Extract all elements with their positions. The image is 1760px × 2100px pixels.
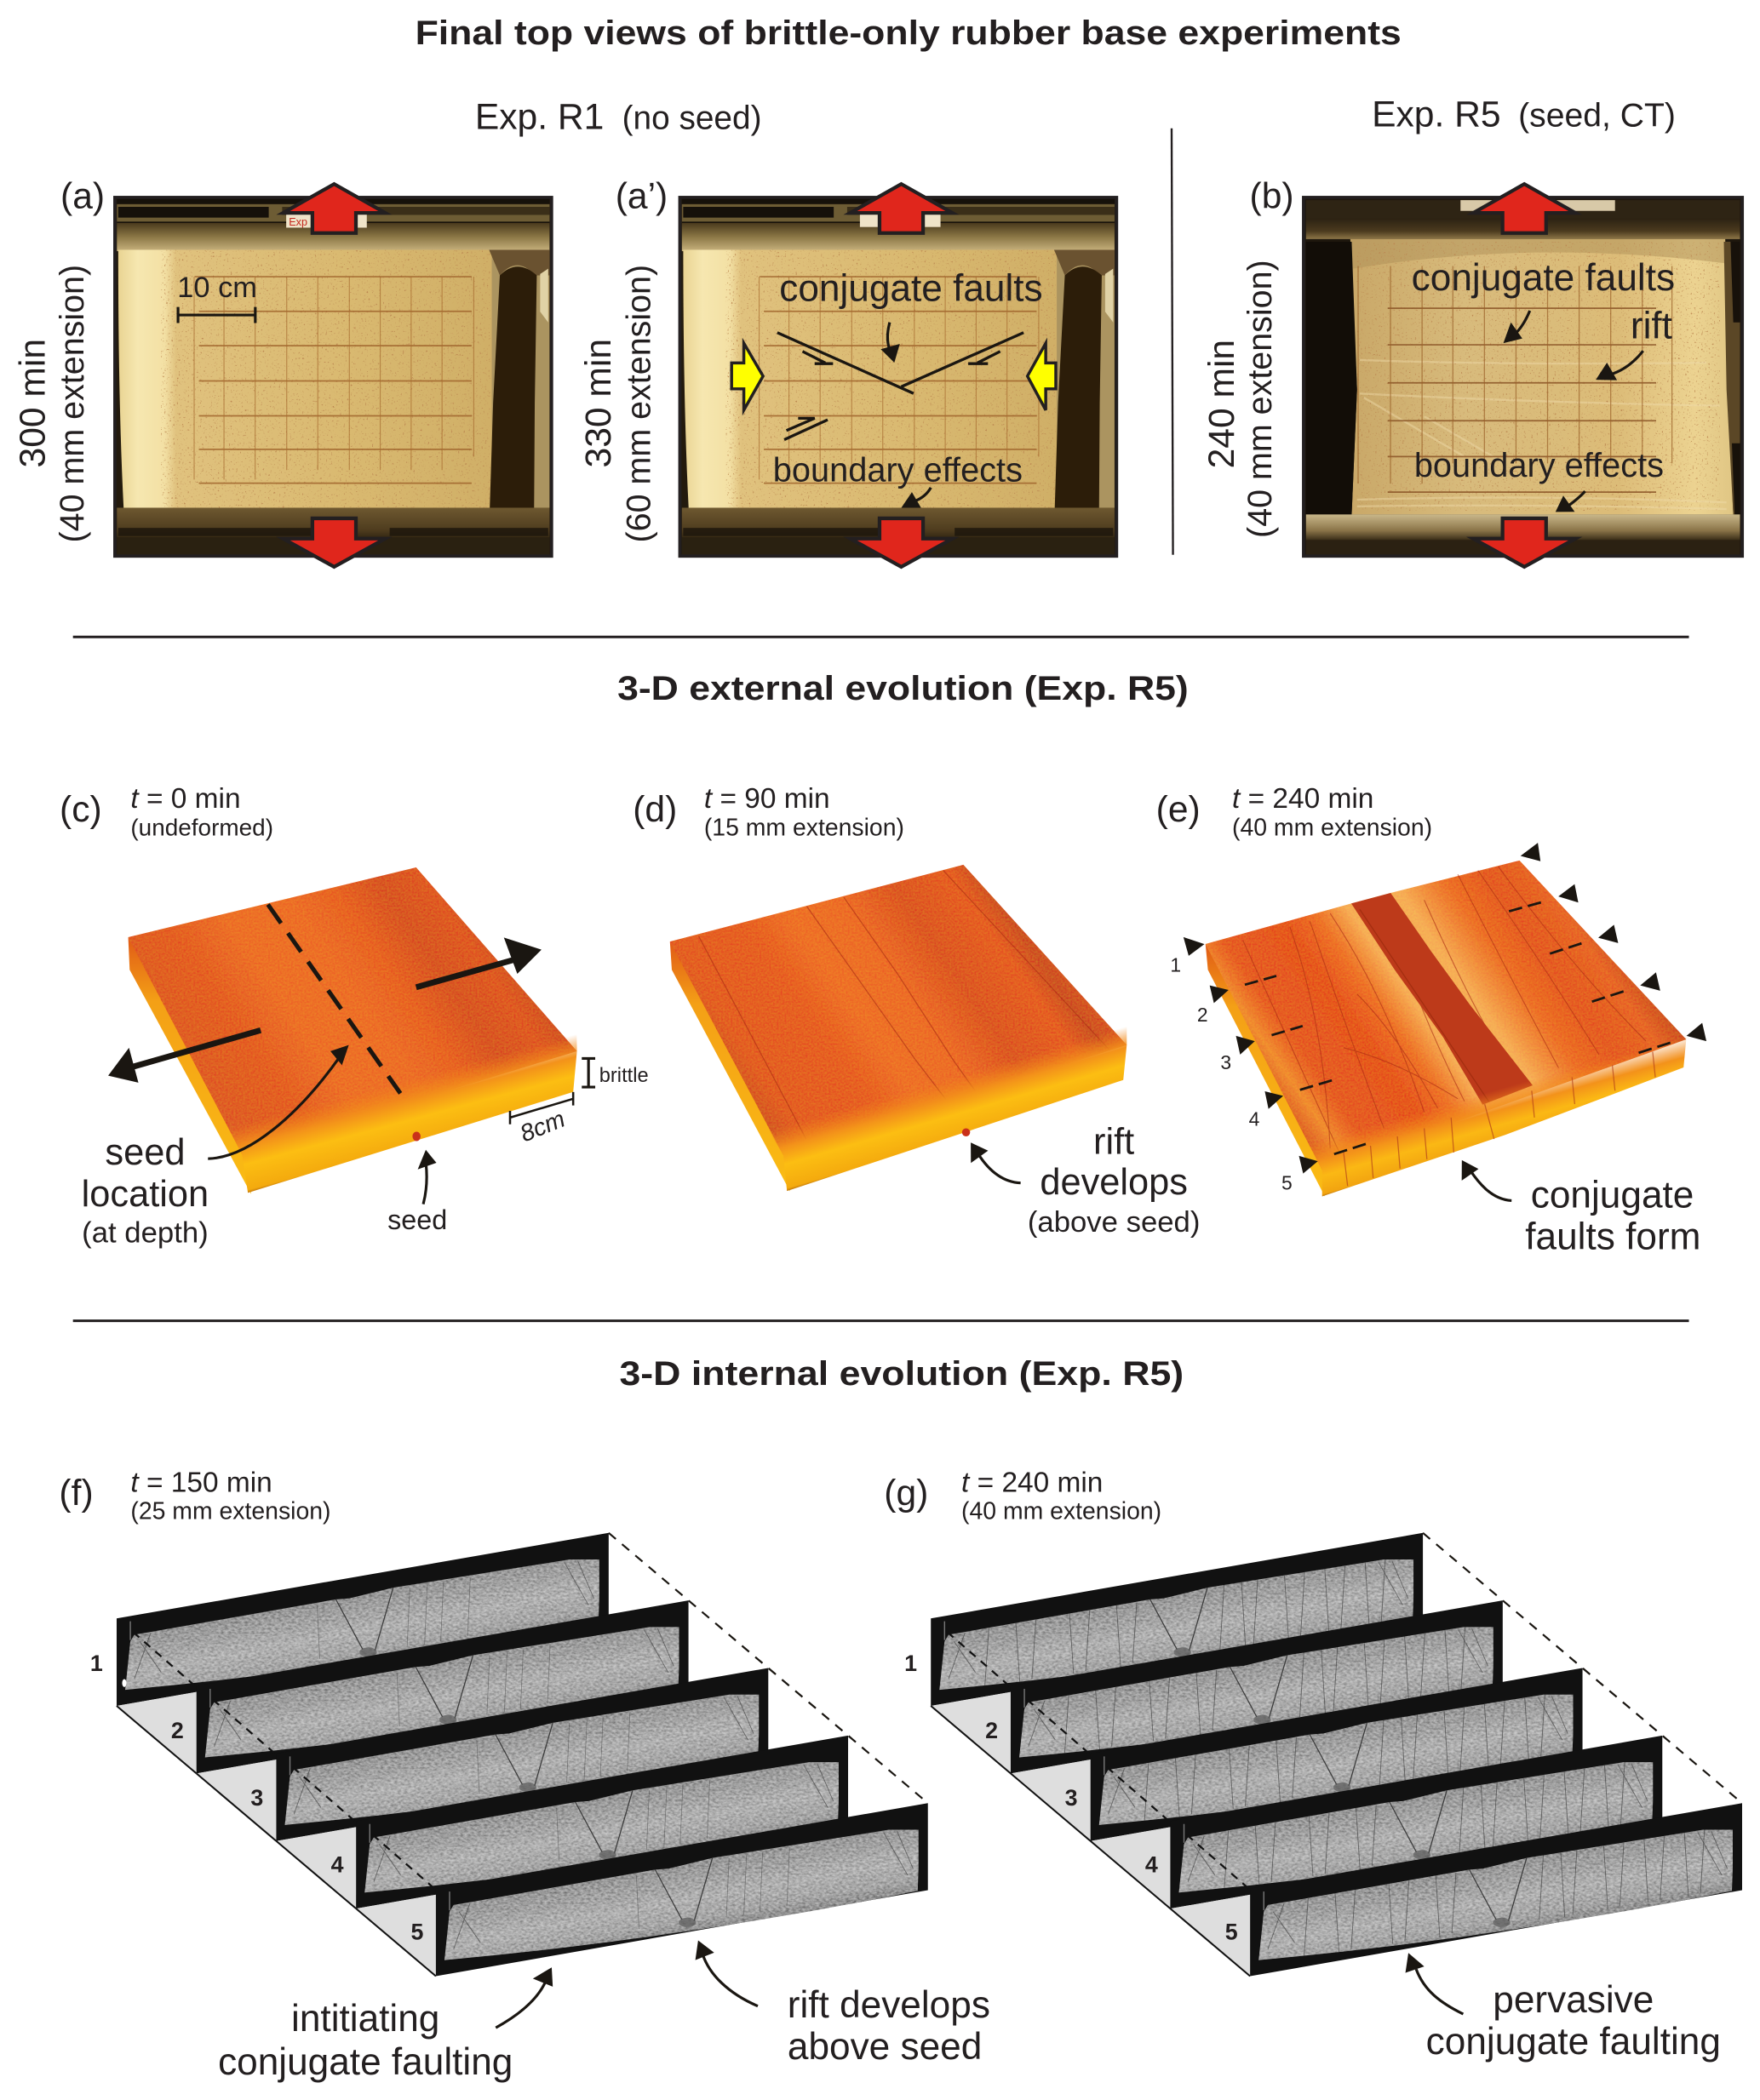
extension arrow right (416, 937, 542, 987)
section 4 g (1170, 1736, 1662, 1977)
duration label a (13, 265, 91, 542)
panel: (b) top view Exp. R5 (1201, 176, 1742, 567)
dashed seed trace (268, 905, 400, 1093)
heading: Exp. R1: (no seed) (622, 100, 762, 136)
boundary effects label and arrow (773, 452, 1023, 507)
yellow compression arrow left (731, 343, 763, 410)
3-D block d (670, 865, 1127, 1192)
section numbers: 4 (1249, 1107, 1260, 1130)
section 1 g (904, 1533, 1423, 1773)
section 2 (197, 1600, 689, 1841)
time label c: (undeformed) (130, 814, 273, 840)
CT sections g (904, 1533, 1742, 1977)
rift label and arrow b: rift (1631, 306, 1672, 347)
fault traces (777, 333, 1023, 439)
time label g (961, 1467, 1161, 1525)
panel: (a') top view with annotations (578, 176, 1116, 567)
section 2 g (1011, 1600, 1503, 1841)
panel letter c: (c) (60, 789, 102, 830)
3-D block c (129, 867, 577, 1194)
conjugate faults form label and arrow (1462, 1160, 1700, 1258)
section numbers (1170, 954, 1293, 1193)
section 1: 2 (171, 1718, 184, 1743)
pervasive conjugate faulting label and arrow (1406, 1953, 1721, 2063)
pervasive conjugate faulting label and arrow: conjugate faulting (1426, 2021, 1721, 2063)
red extension arrow up a' (851, 184, 952, 233)
panel: (e) conjugate faults block (1156, 783, 1706, 1258)
red extension arrow down a' (851, 518, 952, 567)
section 1 g: 1 (904, 1651, 917, 1676)
section 4 g: 5 (1225, 1920, 1238, 1945)
time label d (704, 783, 904, 841)
time label g: t = 240 min (961, 1467, 1103, 1498)
time label f: t = 150 min (130, 1467, 272, 1498)
duration label b: (40 mm extension) (1241, 260, 1279, 538)
boundary effects label and arrow b (1414, 447, 1664, 512)
time label g: (40 mm extension) (961, 1498, 1161, 1525)
3-D block e (1206, 861, 1686, 1196)
title: Final top views of brittle-only rubber base experiments (416, 14, 1402, 52)
duration label b: 240 min (1201, 340, 1242, 468)
section numbers: 5 (1281, 1171, 1293, 1193)
pervasive conjugate faulting label and arrow: pervasive (1493, 1979, 1654, 2021)
panel letter d: (d) (633, 789, 677, 830)
8 cm scale (510, 1092, 573, 1147)
time label d: (15 mm extension) (704, 814, 904, 841)
panel letter b: (b) (1250, 176, 1294, 217)
section 1 (90, 1533, 609, 1773)
duration label a': 330 min (578, 339, 619, 467)
red extension arrow down b (1473, 518, 1575, 567)
time label d: t = 90 min (704, 783, 830, 815)
photo a' (679, 197, 1116, 556)
rift develops above seed label and arrow: rift develops (788, 1984, 990, 2026)
brittle thickness bracket (582, 1058, 649, 1087)
panel letter a: (a) (60, 176, 105, 217)
section 1 g: 2 (985, 1718, 998, 1743)
initiating conjugate faulting label and arrow: intitiating (291, 1998, 439, 2040)
vertical divider between experiments (1172, 129, 1173, 555)
yellow compression arrow right (1028, 343, 1056, 410)
duration label a': (60 mm extension) (620, 265, 657, 542)
boundary effects label and arrow b: boundary effects (1414, 447, 1664, 484)
section position markers (1184, 843, 1706, 1174)
8 cm scale: 8cm (516, 1106, 569, 1147)
seed location label and arrow: location (82, 1174, 209, 1215)
duration label b (1201, 260, 1279, 538)
heading: 3-D external evolution: 3-D external evolution (Exp. R5) (617, 669, 1189, 707)
section 3 g: 4 (1145, 1852, 1158, 1878)
conjugate faults form label and arrow: conjugate (1531, 1175, 1694, 1216)
red extension arrow up a (283, 184, 385, 233)
panel: (d) rift develops block (633, 783, 1200, 1239)
conjugate faults label and arrow b (1412, 257, 1675, 343)
duration label a: (40 mm extension) (54, 265, 91, 542)
rift develops label and arrow: develops (1040, 1162, 1188, 1203)
section 2 g: 3 (1065, 1785, 1078, 1811)
panel: (a) top view (13, 176, 552, 567)
time label e: (40 mm extension) (1232, 814, 1432, 841)
rift label and arrow b (1596, 306, 1672, 381)
section 1: 1 (90, 1651, 103, 1676)
section numbers: 1 (1170, 954, 1181, 976)
initiating conjugate faulting label and arrow (218, 1967, 553, 2083)
photo b (1304, 197, 1742, 556)
section 3: 4 (331, 1852, 344, 1878)
boundary effects label and arrow: boundary effects (773, 452, 1023, 489)
section numbers: 3 (1220, 1051, 1231, 1073)
section 5 (436, 1803, 928, 1977)
panel letter g: (g) (884, 1473, 928, 1513)
dashed perspective line g (1423, 1533, 1742, 1803)
heading: Exp. R5: (seed, CT) (1518, 97, 1676, 134)
seed location label and arrow: (at depth) (82, 1217, 209, 1250)
panel letter e: (e) (1156, 789, 1201, 830)
duration label a' (578, 265, 657, 542)
conjugate faults label and arrow b: conjugate faults (1412, 257, 1675, 299)
seed label and arrow (387, 1150, 447, 1235)
seed location label and arrow: seed (105, 1132, 185, 1173)
dashed perspective line f (609, 1533, 928, 1803)
red extension arrow down a (283, 518, 385, 567)
time label c: t = 0 min (130, 783, 241, 815)
time label e (1232, 783, 1432, 841)
section 3 g (1091, 1668, 1583, 1908)
section numbers: 2 (1197, 1004, 1208, 1026)
rift develops label and arrow (971, 1121, 1200, 1239)
brittle thickness bracket: brittle (599, 1065, 649, 1087)
conjugate faults label and arrow: conjugate faults (779, 267, 1043, 309)
scale bar 10 cm (177, 272, 257, 323)
heading: Exp. R1: Exp. R1 (475, 96, 604, 137)
time label e: t = 240 min (1232, 783, 1373, 815)
time label f: (25 mm extension) (130, 1498, 330, 1525)
section 3 (276, 1668, 768, 1908)
photo a (115, 197, 552, 556)
rift develops label and arrow: rift (1093, 1121, 1134, 1162)
red extension arrow up b (1473, 184, 1575, 233)
time label f (130, 1467, 330, 1525)
panel letter f: (f) (59, 1473, 94, 1513)
scale bar 10 cm: 10 cm (177, 272, 257, 304)
rift develops above seed label and arrow: above seed (788, 2026, 982, 2068)
seed location label and arrow (82, 1045, 349, 1250)
section 4 (356, 1736, 848, 1977)
heading: Exp. R5: Exp. R5 (1372, 94, 1501, 134)
panel: (g) CT sections at t = 240 min (884, 1467, 1742, 2063)
rift develops above seed label and arrow (696, 1941, 990, 2068)
initiating conjugate faulting label and arrow: conjugate faulting (218, 2041, 513, 2083)
conjugate faults form label and arrow: faults form (1525, 1216, 1700, 1258)
conjugate faults label and arrow (779, 267, 1043, 363)
extension arrow left (108, 1030, 261, 1083)
section dashes (1245, 901, 1671, 1154)
panel: (f) CT sections at t = 150 min (59, 1467, 990, 2083)
section 2: 3 (250, 1785, 263, 1811)
panel: (c) undeformed block (60, 783, 649, 1250)
section 4: 5 (411, 1920, 424, 1945)
time label c (130, 783, 273, 840)
photo a: Exp (289, 216, 307, 228)
duration label a: 300 min (13, 339, 54, 467)
heading: 3-D internal evolution: 3-D internal evolution (Exp. R5) (619, 1354, 1184, 1393)
panel letter a': (a’) (616, 176, 668, 217)
seed label and arrow: seed (387, 1204, 447, 1235)
rift develops label and arrow: (above seed) (1028, 1206, 1200, 1239)
section 5 g (1250, 1803, 1742, 1977)
